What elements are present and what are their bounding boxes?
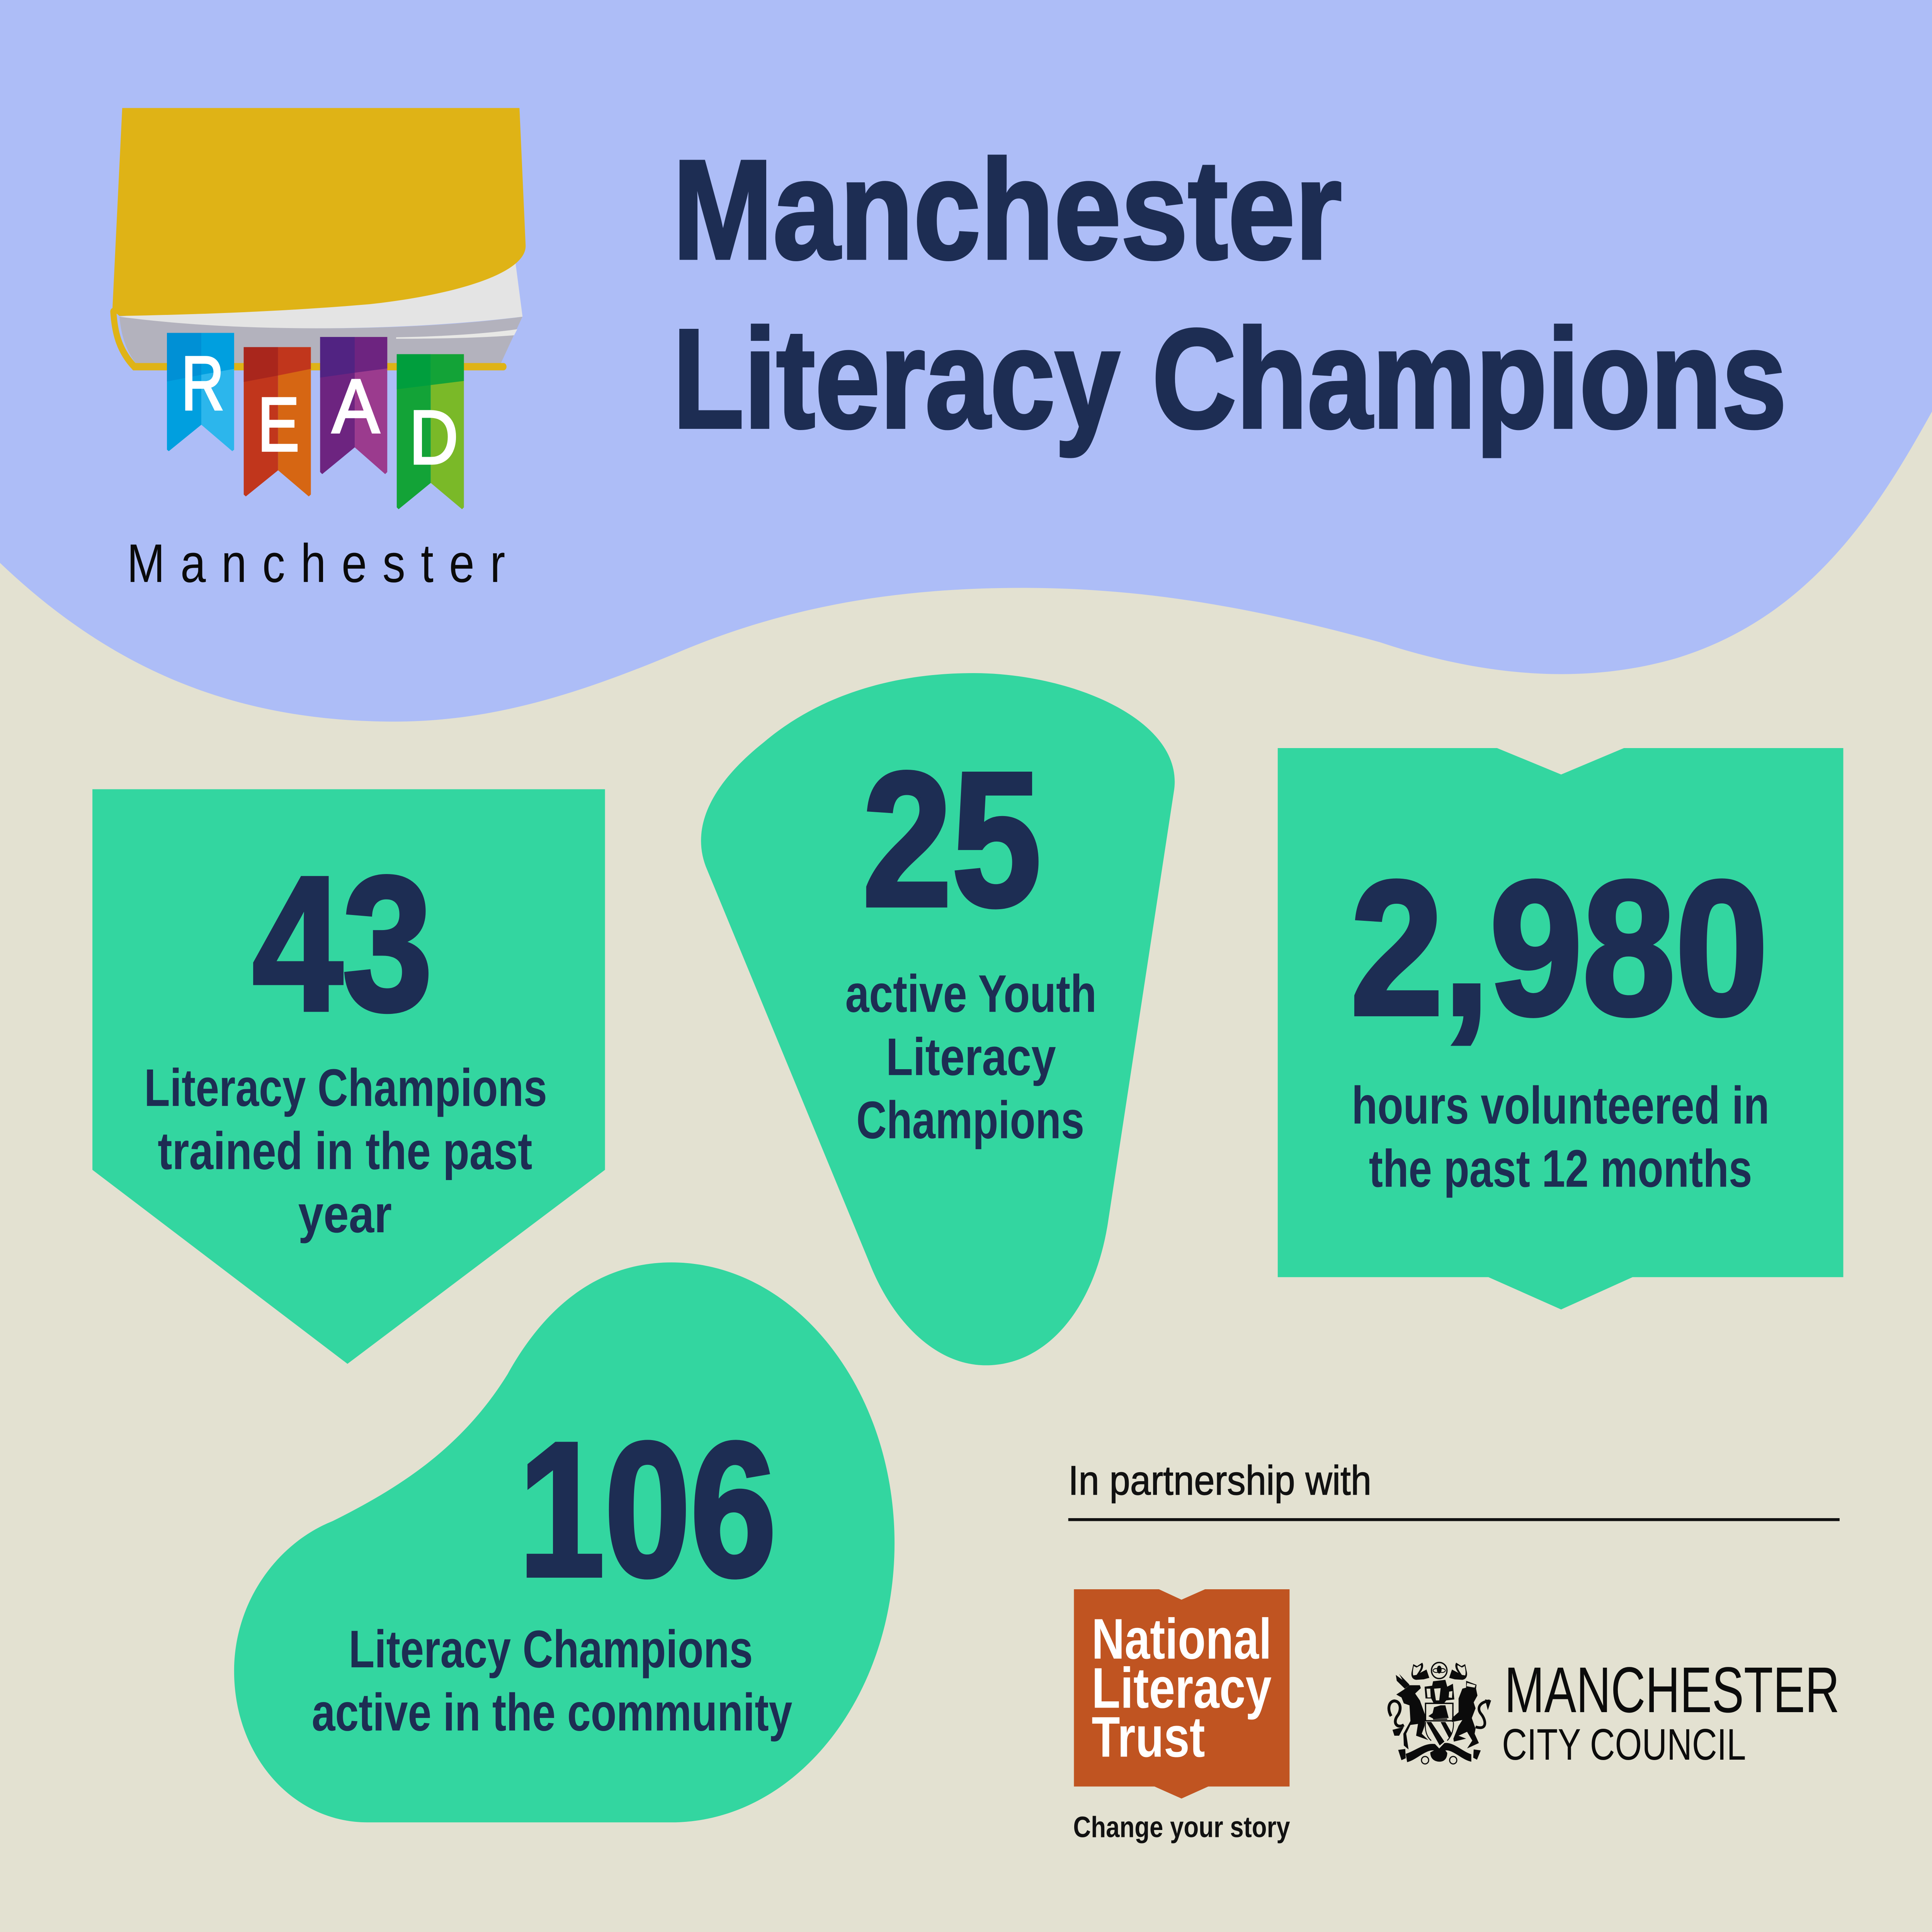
council name: MANCHESTER (1504, 1653, 1840, 1726)
book cover (112, 108, 526, 316)
shield stripes (1425, 1722, 1454, 1745)
logo: Manchester City Council: CITY COUNCIL (1502, 1720, 1746, 1769)
panel shape (92, 789, 605, 1364)
description: Literacy Champions (349, 1619, 753, 1679)
description: hours volunteered in (1352, 1076, 1769, 1135)
panel: 106 community (234, 1262, 895, 1822)
page stripe (396, 329, 517, 339)
bookmark E (244, 347, 311, 497)
title: Manchester (673, 131, 1342, 289)
mantling (1412, 1663, 1467, 1680)
crest bee circle (1432, 1662, 1447, 1679)
book page block (119, 317, 522, 363)
description: year (298, 1185, 392, 1243)
strapline: Change your story (1073, 1810, 1290, 1844)
number: 2,980 (1350, 841, 1768, 1054)
griffin supporter (1389, 1674, 1429, 1749)
panel shape (234, 1262, 895, 1822)
description: active Youth (845, 964, 1097, 1023)
shield chief with ship (1425, 1703, 1453, 1721)
motto scroll (1398, 1743, 1481, 1764)
logo wordmark: Trust (1092, 1705, 1205, 1769)
book back cover (113, 311, 503, 367)
bookmark R: R (181, 340, 224, 426)
lion supporter (1452, 1681, 1491, 1748)
panel: 2,980 hours (1278, 748, 1843, 1310)
description (845, 964, 1097, 1150)
description: active in the community (312, 1683, 792, 1742)
book top pages (119, 250, 522, 328)
description (144, 1058, 547, 1243)
number: 25 (862, 732, 1041, 946)
description: trained in the past (158, 1121, 532, 1180)
logo: Read Manchester (112, 108, 526, 594)
partnership heading (1068, 1458, 1840, 1521)
panel: 43 trained (92, 789, 605, 1364)
title (673, 131, 1787, 458)
logo wordmark (1092, 1607, 1272, 1769)
panel: 25 youth champions (701, 673, 1175, 1365)
logo: Manchester City Council (1389, 1653, 1840, 1769)
logo: National Literacy Trust (1073, 1589, 1290, 1844)
header wave (0, 0, 1932, 721)
description: Champions (856, 1090, 1084, 1150)
title: Literacy Champions (673, 300, 1787, 458)
number: 43 (253, 837, 432, 1050)
bookmark E: E (257, 382, 299, 467)
bookmark D: D (409, 395, 458, 480)
logo wordmark: National (1092, 1607, 1272, 1671)
description: Literacy (886, 1027, 1056, 1086)
logo wordmark: Literacy (1092, 1656, 1272, 1720)
description (1352, 1076, 1769, 1198)
coat of arms (1389, 1662, 1491, 1764)
bookmark A (320, 337, 387, 474)
description (312, 1619, 792, 1742)
logo bookmark shape (1074, 1589, 1289, 1799)
helm (1425, 1680, 1454, 1704)
bookmark A: A (332, 364, 379, 449)
description: Literacy Champions (144, 1058, 547, 1117)
description: the past 12 months (1369, 1139, 1752, 1198)
bookmark D (397, 354, 464, 509)
bookmark R (167, 333, 234, 451)
panel shape (701, 673, 1175, 1365)
partnership heading: In partnership with (1068, 1458, 1371, 1503)
number: 106 (519, 1403, 776, 1616)
panel shape (1278, 748, 1843, 1310)
logo wordmark: Manchester (127, 532, 505, 594)
